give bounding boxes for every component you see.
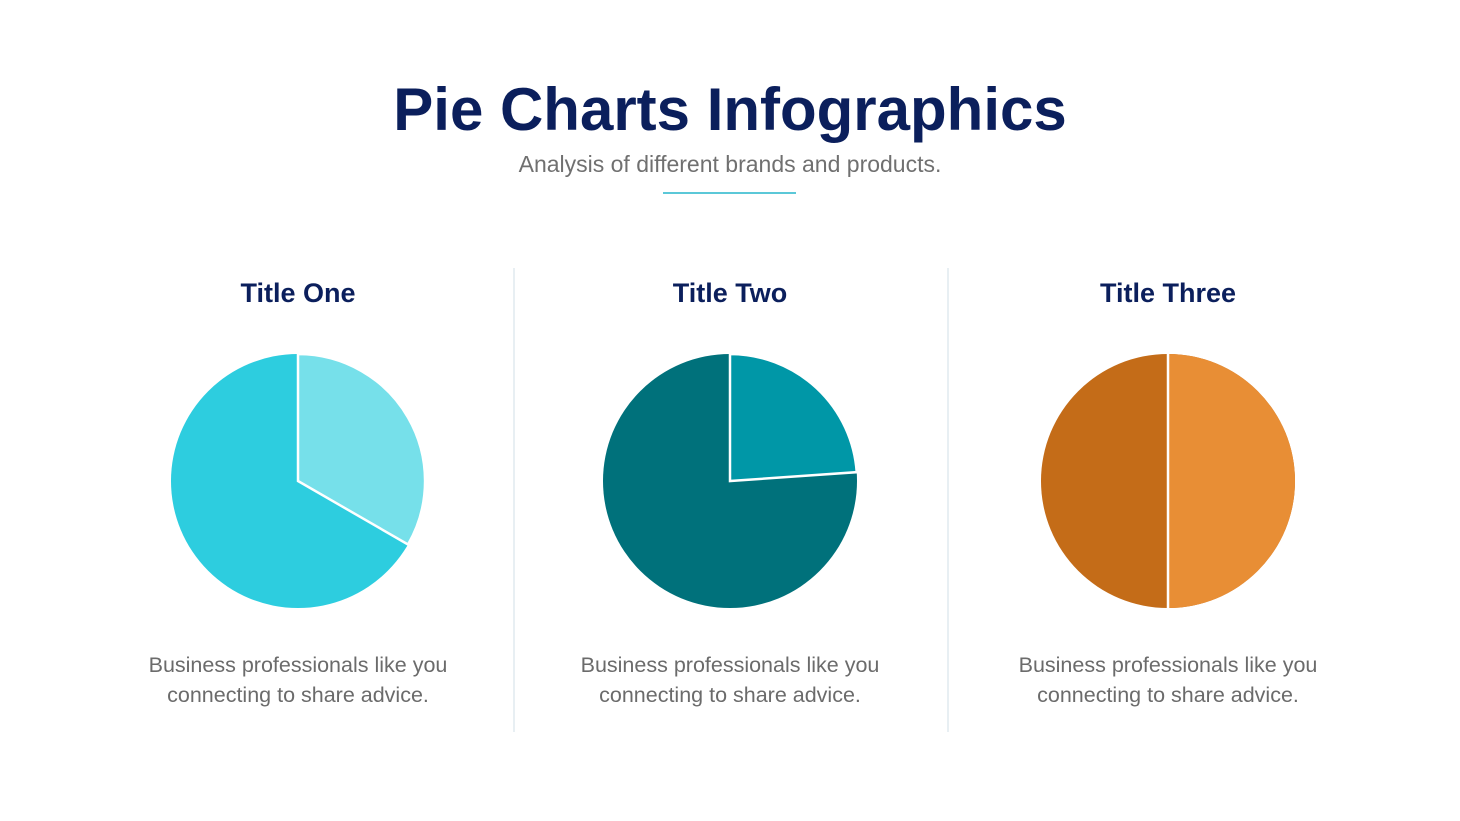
text: description one: connecting to share advice. bbox=[167, 682, 429, 706]
text: description one bbox=[149, 653, 447, 706]
text: description three: connecting to share advice. bbox=[1037, 682, 1299, 706]
pie chart three bbox=[1041, 354, 1295, 608]
text: description one: Business professionals like you bbox=[149, 653, 447, 677]
pie chart one bbox=[171, 354, 424, 608]
panel: title three bbox=[1019, 278, 1317, 706]
panel: title two bbox=[581, 278, 879, 706]
panel: title one bbox=[149, 278, 447, 706]
text: description two bbox=[581, 653, 879, 706]
subtitle: Analysis of different brands and products. bbox=[519, 151, 941, 177]
heading: Title One: Title One bbox=[240, 278, 356, 308]
pie chart two bbox=[603, 354, 857, 608]
heading: Title Two: Title Two bbox=[673, 278, 787, 308]
text: description three bbox=[1019, 653, 1317, 706]
title: Pie Charts Infographics bbox=[393, 76, 1067, 143]
text: description two: connecting to share advice. bbox=[599, 682, 861, 706]
heading: Title Three: Title Three bbox=[1100, 278, 1236, 308]
text: description two: Business professionals like you bbox=[581, 653, 879, 677]
text: description three: Business professionals like you bbox=[1019, 653, 1317, 677]
